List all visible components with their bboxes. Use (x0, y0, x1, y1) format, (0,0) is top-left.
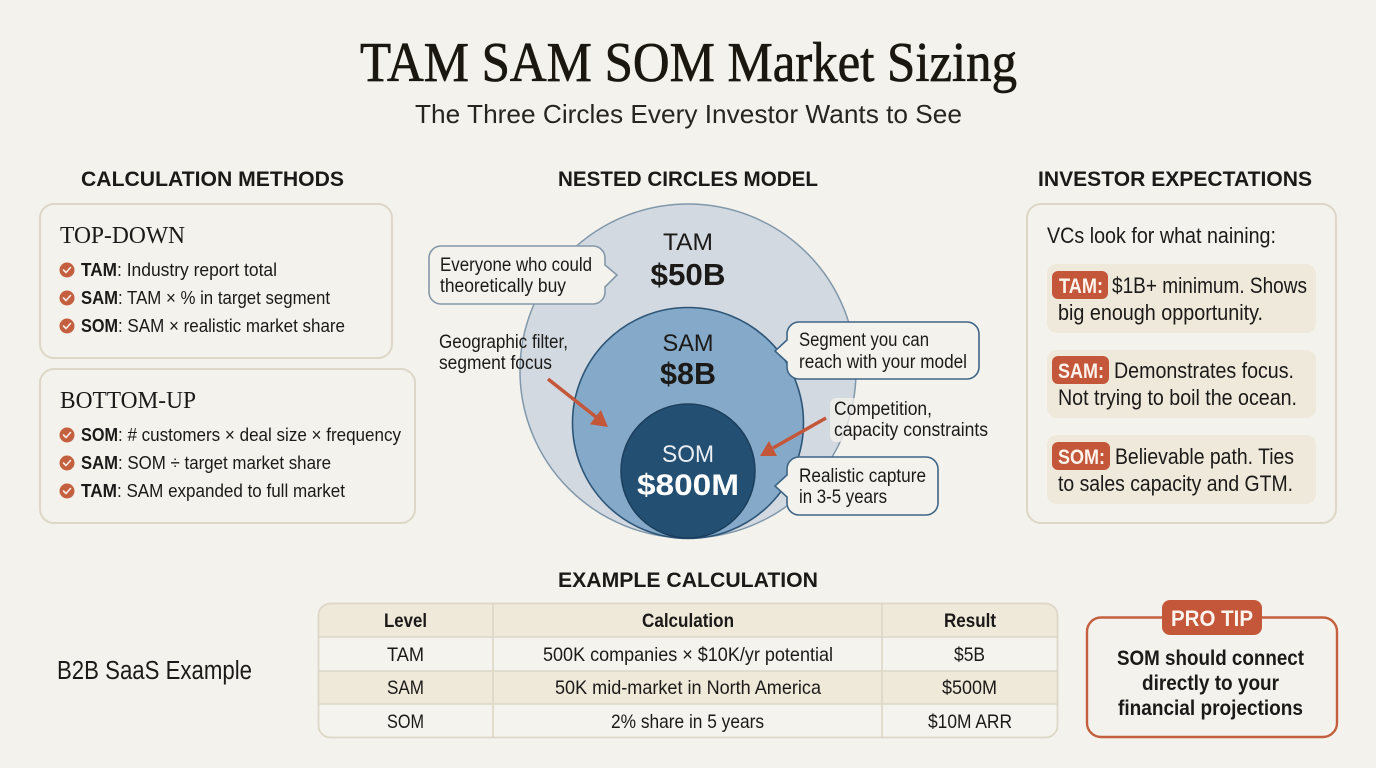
card: SAM expectation: Demonstrates focus. (1114, 358, 1294, 383)
callout: TAM description: theoretically buy (440, 276, 566, 297)
pro tip badge (1162, 600, 1262, 635)
label: competition constraints: Competition, (834, 399, 932, 420)
circle: SOM: $800M (637, 469, 739, 502)
bottom-up item: TAM: : SAM expanded to full market (117, 480, 345, 501)
circle: SAM (572, 308, 804, 538)
card: TAM expectation: big enough opportunity. (1058, 300, 1263, 325)
top-down item: TAM: TAM (81, 259, 117, 280)
card: SAM expectation: Not trying to boil the ocean. (1058, 385, 1297, 410)
callout: SAM description: reach with your model (799, 352, 967, 373)
label: geographic filter: segment focus (439, 353, 552, 374)
panel: bottom-up (40, 369, 415, 523)
subtitle: The Three Circles Every Investor Wants to See (415, 99, 962, 129)
top-down item: SAM: : TAM × % in target segment (118, 287, 330, 308)
top-down item: TAM: : Industry report total (117, 259, 277, 280)
callout: SOM description: in 3-5 years (799, 487, 887, 508)
heading: example calculation: EXAMPLE CALCULATION (558, 568, 818, 592)
table row: SAM: 50K mid-market in North America (555, 677, 821, 699)
top-down item: SOM: SOM (81, 315, 118, 336)
table header row: Result (944, 610, 996, 632)
arrow: SAM to SOM (760, 418, 826, 456)
table: example calculation (318, 604, 1058, 738)
circle: SAM: $8B (660, 357, 716, 391)
table row: TAM: TAM (387, 644, 424, 666)
table header row (384, 610, 996, 632)
callout: TAM description: Everyone who could (440, 255, 592, 276)
card: TAM expectation: TAM: (1059, 275, 1103, 298)
card: SOM expectation: to sales capacity and GTM. (1058, 471, 1293, 496)
bottom-up item: SOM: : # customers × deal size × frequency (118, 424, 402, 445)
top-down heading: TOP-DOWN (60, 223, 185, 249)
card: SOM expectation (1047, 435, 1316, 504)
callout: SAM description: Segment you can (799, 330, 929, 351)
pro tip text: financial projections (1118, 697, 1303, 720)
table row: TAM: 500K companies × $10K/yr potential (543, 644, 833, 666)
top-down item: SAM: SAM (81, 287, 118, 308)
card: TAM expectation: $1B+ minimum. Shows (1112, 273, 1307, 298)
circle: TAM (520, 204, 856, 538)
bottom-up heading: BOTTOM-UP (60, 388, 196, 414)
table row: SOM: 2% share in 5 years (611, 711, 764, 733)
label: B2B SaaS example: B2B SaaS Example (57, 657, 252, 685)
callout: TAM description (429, 246, 617, 304)
circle: TAM: $50B (650, 258, 726, 292)
bottom-up item: SOM: SOM (81, 424, 118, 445)
pro tip text: SOM should connect (1117, 647, 1304, 670)
heading: investor expectations: INVESTOR EXPECTATIONS (1038, 167, 1312, 191)
table row: SAM (387, 677, 997, 699)
table row: SOM: $10M ARR (928, 711, 1012, 733)
label: competition constraints (830, 398, 990, 442)
title: TAM SAM SOM Market Sizing (360, 32, 1017, 94)
table row: TAM: $5B (954, 644, 985, 666)
panel: top-down (40, 204, 392, 358)
table row: SOM (387, 711, 1012, 733)
heading: calculation methods: CALCULATION METHODS (81, 167, 344, 191)
pro tip text (1117, 647, 1304, 720)
bottom-up item: SAM: : SOM ÷ target market share (118, 452, 331, 473)
pro tip badge: PRO TIP (1171, 606, 1253, 631)
card: SOM expectation: SOM: (1058, 446, 1105, 469)
panel: investor expectations (1027, 204, 1336, 523)
callout: SOM description: Realistic capture (799, 466, 926, 487)
table row: SOM: SOM (387, 711, 424, 733)
circle: SOM: SOM (662, 441, 714, 468)
card: SAM expectation (1047, 350, 1316, 418)
table row: SAM: $500M (942, 677, 997, 699)
table row: TAM (387, 644, 985, 666)
label: geographic filter: Geographic filter, (439, 332, 568, 353)
circle: TAM: TAM (663, 229, 713, 256)
arrow: TAM to SAM (548, 379, 608, 427)
table row: SAM: SAM (387, 677, 424, 699)
callout: SAM description (775, 322, 979, 379)
nested circles chart (520, 204, 856, 538)
label: competition constraints: capacity constraints (834, 420, 988, 441)
label: geographic filter (439, 332, 568, 374)
callout: pro tip (1087, 600, 1337, 737)
circle: SAM: SAM (662, 330, 714, 357)
heading: nested circles model: NESTED CIRCLES MODEL (558, 167, 818, 191)
callout: SOM description (775, 457, 938, 515)
bottom-up item: SAM: SAM (81, 452, 118, 473)
circle: SOM (621, 404, 755, 538)
table header row: Calculation (642, 610, 734, 632)
bottom-up item: TAM: TAM (81, 480, 117, 501)
card: SOM expectation: Believable path. Ties (1115, 444, 1294, 469)
card: SAM expectation: SAM: (1058, 360, 1104, 383)
top-down item: SOM: : SAM × realistic market share (118, 315, 345, 336)
pro tip text: directly to your (1142, 672, 1279, 695)
investor intro text: VCs look for what naining: (1047, 223, 1276, 248)
table header row: Level (384, 610, 427, 632)
card: TAM expectation (1047, 264, 1316, 333)
